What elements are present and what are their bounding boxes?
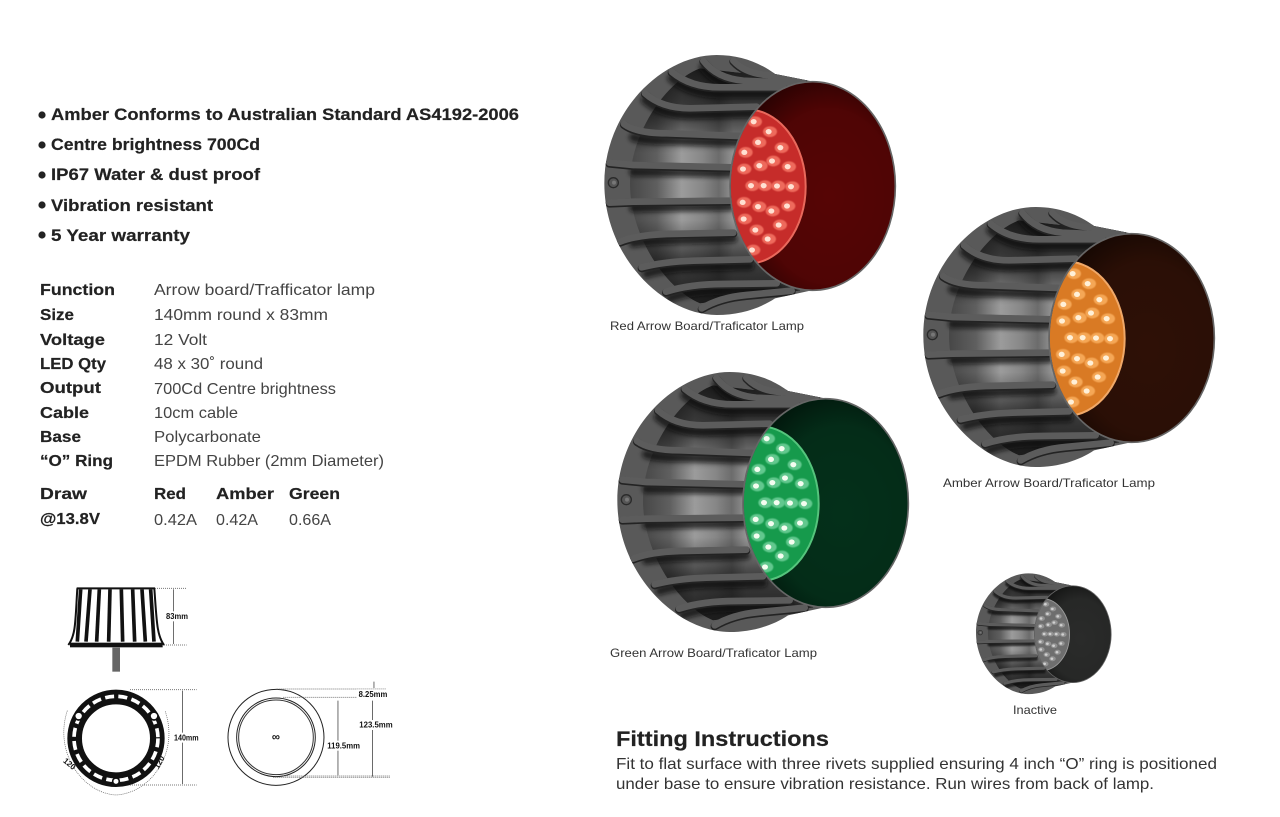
diagram: front view with dimensions: 123.5mm [359, 721, 393, 730]
green lamp [617, 372, 908, 632]
fitting body text [616, 756, 1217, 793]
diagram: base ring with 140mm dimension: 140mm [174, 734, 199, 743]
fitting body text: under base to ensure vibration resistance. Run wires from back of lamp. [616, 776, 1154, 793]
specification table: Function [40, 282, 115, 299]
feature: vibration: Vibration resistant [51, 196, 213, 215]
specification table: Arrow board/Trafficator lamp [154, 282, 375, 299]
current draw table [40, 486, 340, 529]
diagram: front view with dimensions: ∞ [272, 732, 280, 744]
feature: warranty: 5 Year warranty [51, 226, 191, 245]
specification table: 10cm cable [154, 405, 238, 422]
current draw table: Amber [216, 486, 274, 503]
inactive lamp [976, 573, 1111, 694]
fitting instructions [616, 728, 1217, 793]
diagram: front view with dimensions: 119.5mm [327, 742, 360, 751]
feature: centre brightness: Centre brightness 700Cd [51, 135, 260, 154]
diagram: base ring with 140mm dimension: 120 [61, 756, 78, 772]
current draw table: 0.42A [216, 512, 258, 529]
current draw table: 0.42A [154, 512, 197, 529]
specification table: “O” Ring [40, 453, 113, 470]
diagram: side view with 83mm dimension [68, 588, 189, 672]
current draw table: Draw [40, 486, 88, 503]
specification table: Base [40, 429, 81, 446]
specification table: 48 x 30˚ round [154, 356, 263, 373]
diagram: base ring with 140mm dimension [61, 690, 200, 795]
specification table: Voltage [40, 332, 105, 349]
specification table: LED Qty [40, 356, 106, 373]
specification table: 140mm round x 83mm [154, 307, 328, 324]
specification table: Polycarbonate [154, 429, 261, 446]
current draw table: 0.66A [289, 512, 331, 529]
feature: IP67: IP67 Water & dust proof [51, 165, 260, 184]
caption: red lamp: Red Arrow Board/Traficator Lamp [610, 319, 804, 333]
specification table: 700Cd Centre brightness [154, 381, 336, 398]
specification table [40, 282, 384, 470]
diagram: front view with dimensions: 8.25mm [359, 690, 387, 699]
specification table: Size [40, 307, 74, 324]
diagram: side view with 83mm dimension: 83mm [166, 612, 188, 621]
specification table: 12 Volt [154, 332, 208, 349]
current draw table: Red [154, 486, 186, 503]
caption: green lamp: Green Arrow Board/Traficator Lamp [610, 646, 817, 660]
caption: amber lamp: Amber Arrow Board/Traficator Lamp [943, 476, 1155, 490]
caption: inactive lamp: Inactive [1013, 703, 1057, 717]
amber lamp [923, 207, 1214, 467]
fitting heading: Fitting Instructions [616, 728, 829, 751]
diagram: base ring with 140mm dimension: 120 [152, 754, 167, 770]
specification table: Cable [40, 405, 89, 422]
specification table: EPDM Rubber (2mm Diameter) [154, 453, 384, 470]
specification table: Output [40, 380, 102, 397]
red lamp [604, 55, 895, 315]
current draw table: @13.8V [40, 511, 100, 528]
diagram: front view with dimensions [228, 682, 393, 785]
current draw table: Green [289, 486, 340, 503]
feature list [38, 105, 519, 245]
feature: amber standard: Amber Conforms to Australian Standard AS4192-2006 [51, 105, 519, 124]
fitting body text: Fit to flat surface with three rivets supplied ensuring 4 inch “O” ring is positioned [616, 756, 1217, 773]
